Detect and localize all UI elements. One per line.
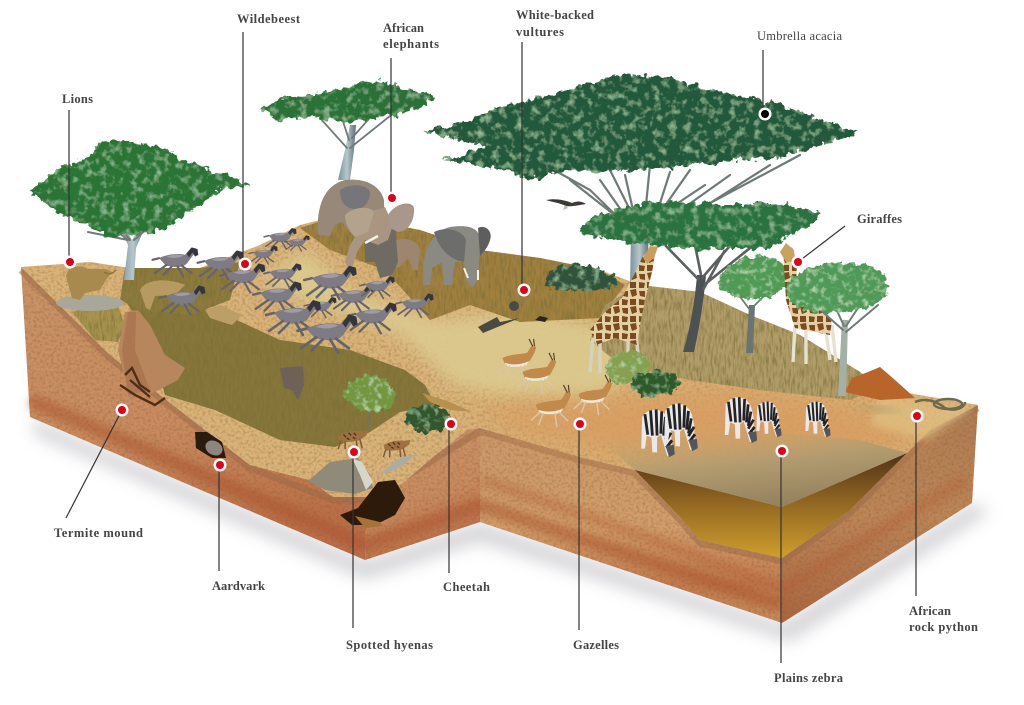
termite mound: [118, 310, 185, 405]
label: African elephants: elephants: [383, 37, 439, 51]
rock outcrop and hyena den: [308, 454, 418, 528]
den hole: [340, 480, 405, 525]
right termite mound: [845, 367, 915, 400]
marker: wildebeest: [238, 258, 252, 270]
label: Spotted hyenas: Spotted hyenas: [346, 638, 433, 652]
lone wildebeest: [280, 366, 304, 400]
small grass tuft: [848, 406, 905, 413]
label: Umbrella acacia: Umbrella acacia: [757, 29, 842, 43]
elephant: front head: [345, 207, 393, 272]
acacia tree: small right: [785, 264, 888, 396]
marker: lions: [64, 256, 76, 268]
ground vultures: [478, 301, 548, 333]
trunk: [630, 235, 649, 285]
python: [915, 399, 965, 410]
body and neck: [590, 245, 657, 345]
elephant ear: front right: [388, 204, 414, 232]
branches: [545, 155, 800, 238]
marker: gazelles: [574, 418, 586, 430]
acacia tree: left: [30, 140, 252, 280]
elephant: back: [318, 180, 384, 236]
soil banding: [21, 270, 978, 605]
lioness: lower: [205, 305, 242, 325]
termite tunnels: [120, 368, 165, 405]
aardvark burrow: [195, 432, 226, 459]
hillside golden grass: [300, 215, 625, 322]
label: African rock python: rock python: [909, 620, 978, 634]
marker: hyenas: [348, 446, 360, 458]
label: Aardvark: Aardvark: [212, 579, 265, 593]
gazelles: [498, 339, 612, 427]
lion rock: [56, 295, 124, 311]
legs: [793, 325, 836, 364]
elephant tusk: [365, 236, 378, 243]
elephant calf: [391, 239, 420, 270]
soil face: left front: [21, 267, 367, 560]
canopy: [30, 140, 252, 238]
marker: vultures: [518, 284, 530, 296]
acacia tree: back: [260, 80, 436, 180]
acacia tree: large umbrella: [424, 74, 860, 285]
dark savanna grass: [125, 300, 435, 447]
elephant ear: back: [340, 185, 370, 209]
ground surface: [21, 215, 978, 510]
flat slab: [378, 454, 418, 475]
label: Termite mound: Termite mound: [54, 526, 143, 540]
elephant: front body: [365, 225, 398, 278]
soil face: notch: [365, 428, 480, 560]
elephant ear: right: [478, 227, 491, 256]
acacia tree: small light: [718, 255, 786, 353]
legs: [590, 335, 640, 373]
shrub: acacia sapling: [342, 374, 395, 430]
canopy: [578, 202, 820, 250]
giraffe: left: [590, 245, 658, 373]
canopy: [718, 255, 786, 300]
hyena cub: [355, 516, 383, 528]
cheetah: [422, 393, 472, 412]
marker dots: [64, 108, 924, 472]
canopy: [424, 74, 860, 180]
soil cross-section block: [21, 267, 978, 623]
head: [643, 246, 658, 264]
label: White-backed vultures: vultures: [516, 25, 564, 39]
ground base: [21, 215, 978, 510]
zebras: [641, 397, 831, 457]
label: Gazelles: Gazelles: [573, 638, 619, 652]
block drop shadow: [30, 417, 990, 642]
giraffe: right: [780, 243, 836, 364]
marker: cheetah: [444, 418, 458, 430]
pale python corner: [870, 395, 975, 440]
large rock: [308, 458, 373, 494]
orange cracked earth: [470, 385, 930, 470]
marker: python: [910, 410, 924, 422]
label: Wildebeest: Wildebeest: [237, 12, 301, 26]
trunk: [683, 275, 706, 352]
elephant ear: front left: [345, 208, 374, 237]
rock highlight: [352, 458, 373, 490]
body and neck: [783, 247, 832, 335]
head: [780, 243, 795, 262]
shrub: giraffe bush: [605, 351, 682, 396]
marker: zebra: [776, 444, 788, 458]
canopy: [785, 264, 888, 313]
flying vulture: [546, 199, 586, 210]
elephant: right: [423, 226, 480, 288]
water surface: [600, 425, 907, 507]
upper-left grass: [120, 262, 240, 315]
acacia tree: second: [578, 202, 820, 352]
waterhole: [600, 425, 907, 558]
left sandy corner grass: [72, 298, 125, 342]
soil face: centre: [480, 428, 782, 623]
elephants group: [318, 180, 491, 288]
label: Cheetah: Cheetah: [443, 580, 490, 594]
label: African rock python: African: [909, 604, 951, 618]
lion: [56, 266, 124, 311]
marker: aardvark: [214, 458, 226, 472]
elephant ear: right front: [434, 229, 466, 262]
pale sandy clearing: [260, 250, 640, 395]
wildebeest herd: [152, 228, 434, 400]
branches: [88, 205, 195, 240]
spotted hyenas: [338, 430, 410, 457]
marker: elephants: [386, 192, 398, 204]
label: African elephants: African: [383, 21, 424, 35]
label: Plains zebra: Plains zebra: [774, 671, 844, 685]
branches: [665, 240, 760, 290]
label: Giraffes: Giraffes: [857, 212, 902, 226]
lioness: left: [140, 280, 185, 310]
hillside bush: [545, 264, 620, 291]
label: White-backed vultures: White-backed: [516, 8, 594, 22]
aardvark: [203, 437, 225, 459]
pool wall: [635, 453, 907, 558]
soil face: right: [782, 405, 978, 623]
leader lines: [66, 32, 916, 663]
tree hill: [590, 285, 880, 400]
marker: umbrella acacia: [758, 108, 772, 120]
label: Lions: Lions: [62, 92, 93, 106]
marker: giraffes: [792, 256, 804, 268]
canopy: [260, 80, 436, 122]
marker: termite mound: [116, 404, 128, 416]
shrub: cheetah bush: [402, 405, 451, 433]
trunk: [120, 222, 146, 280]
elephant tusks: [464, 268, 478, 280]
